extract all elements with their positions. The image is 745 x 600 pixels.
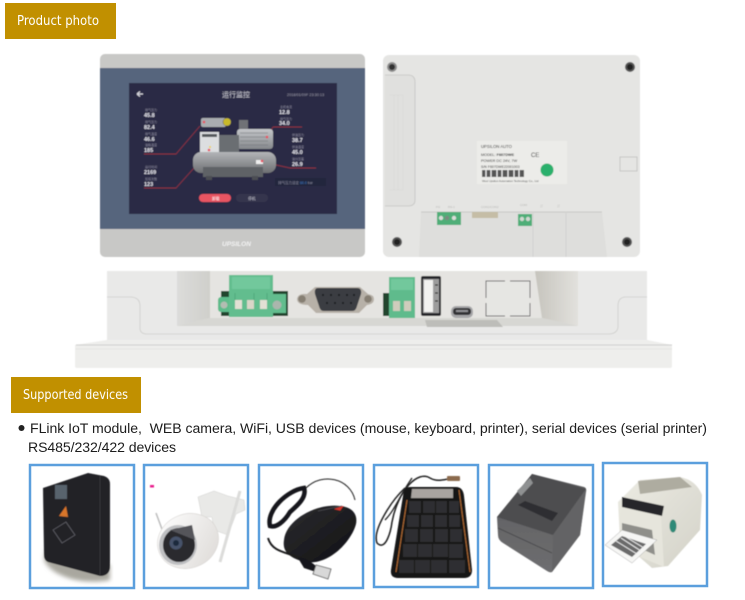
screen: 排气温度 — [145, 131, 157, 136]
panel: back of HMI: ⇌ — [557, 203, 560, 208]
label — [477, 141, 567, 184]
screen: 运行时间 — [145, 164, 157, 169]
text block: supported device list: FLink IoT module, WEB camera, WiFi, USB devices (mouse, keyboard, printer), serial devices (serial printer) — [30, 420, 707, 436]
screen: 45.0 — [292, 150, 303, 156]
panel: back of HMI: RS-1 — [448, 205, 455, 209]
panel: back of HMI: COM — [520, 203, 528, 207]
label: MODEL: F607DWE — [481, 153, 515, 157]
screen: 38.7 — [292, 138, 303, 144]
screen: 12.8 — [279, 110, 290, 116]
screen: 油箱温度 — [145, 142, 157, 147]
screen: 排气压力 — [145, 119, 157, 124]
screen: 供油压力 — [292, 132, 304, 137]
device: WEB camera — [144, 465, 248, 588]
screen: 45.8 — [144, 113, 155, 119]
connector: DB9 serial port — [297, 287, 374, 313]
screen: 排气压力设定 60.0 bar — [278, 180, 314, 185]
screen: 34.0 — [279, 121, 290, 127]
device: FLink IoT module — [30, 465, 134, 588]
label: UPSILON AUTO — [481, 144, 513, 149]
screen: 主机电流 — [280, 104, 292, 109]
screen: 82.4 — [144, 125, 156, 131]
connector: green 2-pin terminal — [383, 277, 415, 318]
heading: Product photo: Product photo — [17, 14, 99, 29]
text block: supported device list: RS485/232/422 devices — [28, 439, 176, 455]
panel: back of HMI — [383, 55, 640, 257]
connector: green power terminal — [218, 275, 288, 317]
screen: 运行监控 — [222, 90, 250, 99]
screen: 26.9 — [292, 162, 303, 168]
panel: back of HMI: CON1/CON2 — [481, 205, 499, 209]
connector recess — [177, 271, 578, 327]
blanking plate — [486, 281, 530, 316]
compressor illustration — [193, 118, 276, 180]
label: Wuxi Upsilon Automation Technology Co., Ltd — [482, 179, 539, 183]
screen — [129, 83, 337, 214]
panel: front of HMI: UPSILON — [222, 241, 251, 248]
screen: 2018/01/09F 23:30:13 — [287, 93, 324, 97]
screen: 油分压差 — [292, 156, 304, 161]
screen: 卸载 — [212, 196, 220, 201]
screen: 123 — [144, 182, 153, 188]
heading: Product photo — [5, 3, 116, 39]
screen: 46.6 — [144, 137, 155, 143]
device: USB mouse — [259, 465, 363, 588]
label: S/N F607DWE22001003 — [481, 165, 520, 169]
panel: back of HMI: ⇌ — [540, 203, 543, 208]
connector: USB A port — [421, 276, 441, 316]
device: USB keypad — [374, 465, 478, 587]
screen: 供油温度 — [292, 144, 304, 149]
device: label printer — [603, 463, 707, 586]
heading: Supported devices: Supported devices — [23, 388, 128, 403]
screen: 2169 — [144, 170, 156, 176]
screen: 加载次数 — [145, 176, 157, 181]
label: CE — [531, 153, 539, 159]
text block: supported device list — [18, 420, 707, 455]
label: POWER DC 24V, 7W — [481, 159, 518, 163]
connector: micro USB port — [451, 306, 473, 318]
screen: 排气压力 — [280, 116, 292, 121]
screen: 185 — [144, 148, 153, 154]
panel: front of HMI — [100, 54, 365, 257]
device: serial receipt printer — [489, 465, 593, 588]
panel: back of HMI: FG — [436, 205, 441, 209]
heading: Supported devices — [11, 377, 141, 413]
panel: bottom view of HMI connectors — [75, 271, 672, 368]
screen: 停机 — [248, 196, 256, 201]
screen: 排气压力 — [145, 107, 157, 112]
